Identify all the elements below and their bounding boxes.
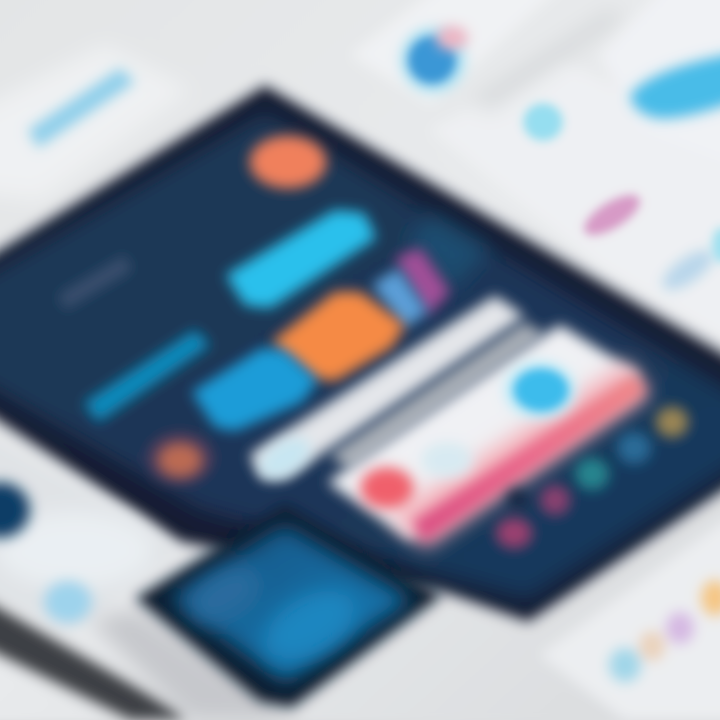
icon: pie accent: [436, 26, 468, 50]
tablet screen: [0, 112, 720, 600]
underlay: grey between bar and card: [330, 322, 545, 470]
icon: blue circle halo: [504, 361, 576, 419]
card bar: blue: [28, 68, 135, 148]
card: pale pink band: [390, 362, 650, 548]
bar: white diagonal: [250, 296, 524, 478]
icon: small orange diamond halo: [146, 432, 214, 484]
card: pink edge: [412, 374, 646, 542]
icon: pale tile: [421, 442, 473, 478]
shadow: grey band between cards: [470, 8, 625, 112]
device edge: [0, 585, 185, 720]
icon: pie halo: [401, 28, 465, 92]
floor: lower grey: [90, 610, 290, 720]
icon: blue pie: [408, 36, 456, 84]
card: top left: [0, 45, 190, 200]
bar: teal diagonal: [84, 330, 210, 422]
card: right middle: [430, 60, 720, 365]
icons: pink dots: [496, 485, 570, 548]
panel: teal behind tiles: [405, 215, 490, 290]
bar end: pale blue: [253, 430, 317, 486]
tile: cyan: [226, 210, 376, 308]
phone screen tile: bright: [253, 576, 367, 674]
tile: blue: [372, 268, 428, 328]
icon: pale cyan edge: [712, 227, 720, 263]
icon: pink stripe: [578, 187, 646, 243]
icon: small orange diamond: [158, 443, 202, 477]
card: bottom left: [0, 420, 290, 720]
tablet text: faint lines: [58, 255, 132, 310]
tablet: main dark: [0, 85, 720, 622]
icon: pale blue stripes: [657, 243, 719, 297]
icon: dark blue tile: [0, 482, 30, 538]
icons: teal dots: [575, 432, 651, 490]
tile: orange: [272, 292, 405, 381]
tile: blue lower: [192, 348, 318, 431]
icon: gold diamond: [656, 407, 688, 437]
icon: pale blue circle: [44, 581, 92, 623]
icons: colour dots row: [609, 580, 720, 682]
icon: red circle: [360, 467, 414, 509]
card highlight: [0, 512, 153, 588]
card shape: blue blob: [630, 52, 720, 119]
phone screen: [168, 525, 412, 682]
phone screen tile: muted: [181, 557, 269, 633]
phone: small dark device: [135, 505, 442, 708]
icon: blue circle: [513, 368, 569, 412]
tile: purple stripes: [395, 248, 450, 315]
icon: orange circle: [250, 136, 326, 188]
card: bottom right: [540, 495, 720, 720]
card: top centre: [350, 0, 580, 105]
card: white panel: [328, 325, 640, 540]
icon: pale blue circle: [523, 103, 563, 141]
card: top right: [600, 0, 720, 175]
